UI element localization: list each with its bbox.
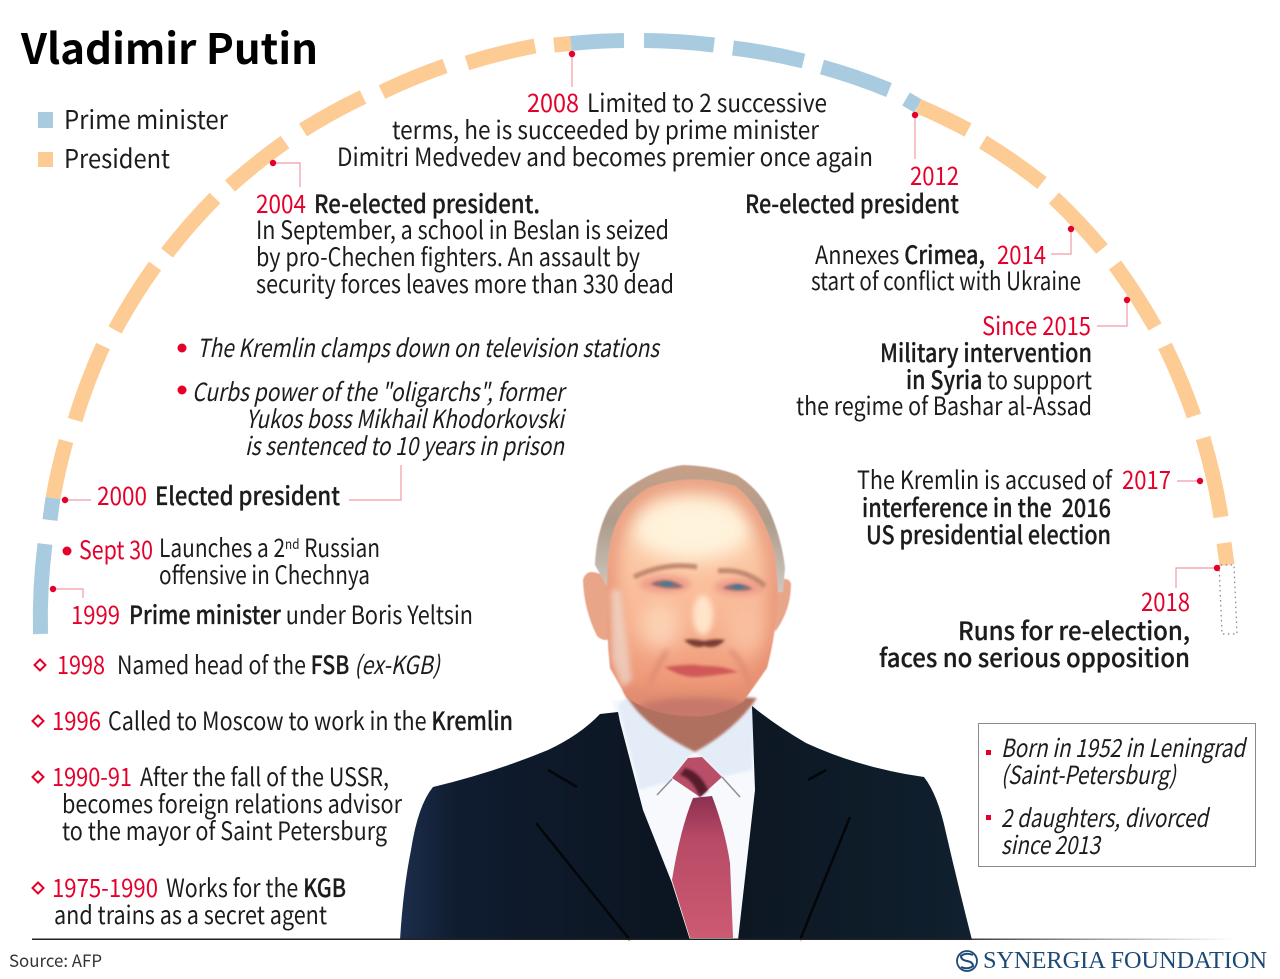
portrait: neck: [623, 690, 757, 752]
event: 2004: [256, 160, 674, 301]
event: 2012: Re-elected president: [745, 185, 959, 221]
portrait: forehead highlight: [632, 496, 752, 560]
event: 2018: Runs for re-election,: [958, 612, 1190, 648]
event: 2004: security forces leaves more than 330 dead: [256, 265, 674, 301]
legend: president: President: [64, 139, 170, 176]
event: 1996: Called to Moscow to work in the Kremlin: [108, 702, 513, 738]
event: 1990-91: to the mayor of Saint Petersburg: [62, 812, 387, 848]
event: 2008: [337, 51, 873, 174]
portrait: head: [583, 465, 791, 720]
panel: personal facts: (Saint-Petersburg): [1001, 756, 1177, 792]
portrait of Vladimir Putin: [400, 465, 972, 940]
event: 1975-1990: [32, 869, 346, 932]
icon: S roundel: [957, 951, 977, 971]
event: 2008: Limited to 2 successive: [587, 84, 827, 120]
event: since 2015 Syria: [796, 297, 1130, 423]
event: 2018: faces no serious opposition: [879, 639, 1190, 675]
portrait: hair: [595, 465, 785, 592]
event: 1999: [50, 586, 473, 632]
event: 1999: 1999: [71, 596, 120, 632]
portrait: collar shading: [618, 698, 755, 790]
notes: Kremlin and oligarchs: [178, 329, 661, 463]
portrait: collar flap edges: [657, 777, 740, 797]
event: 2017: 2017: [1122, 461, 1171, 497]
event: Sept 30: Launches a 2: [159, 529, 310, 565]
event: 1975-1990: 1975-1990: [52, 869, 158, 905]
panel: personal facts: [978, 724, 1256, 866]
event: 2000: 2000: [97, 477, 147, 513]
event: Sept 30: nd: [285, 534, 299, 554]
logo: Synergia Foundation: SYNERGIA FOUNDATION: [983, 948, 1267, 974]
portrait: brows and eyes: [634, 566, 766, 596]
portrait: nose: [684, 595, 725, 647]
event: since 2015 Syria: Military intervention: [880, 334, 1092, 370]
event: 1975-1990: Works for the KGB: [166, 869, 346, 905]
notes: Kremlin and oligarchs: is sentenced to 10 years in prison: [245, 427, 565, 463]
event: 2018: 2018: [1141, 583, 1190, 619]
event: 1998: 1998: [57, 646, 105, 682]
event: Sept 30: Sept 30: [79, 531, 153, 567]
title: Vladimir Putin: [20, 16, 318, 77]
event: 1990-91: 1990-91: [52, 758, 132, 794]
event: 2008: terms, he is succeeded by prime minister: [392, 111, 819, 147]
event: 1990-91: becomes foreign relations advisor: [62, 785, 402, 821]
baseline rule: [32, 938, 1232, 940]
event: 2017: US presidential election: [866, 516, 1111, 552]
event: 1990-91: After the fall of the USSR,: [140, 758, 389, 794]
event: 1999: Prime minister under Boris Yeltsin: [129, 596, 473, 632]
event: Sept 30: offensive in Chechnya: [159, 556, 370, 592]
event: 2017: [857, 461, 1203, 552]
portrait: lapel lines: [536, 770, 850, 940]
event: 2017: interference in the 2016: [862, 489, 1111, 525]
event: 2018: [879, 565, 1220, 675]
portrait: face edge shading: [606, 479, 778, 686]
event: 2012: 2012: [910, 157, 959, 193]
event: 1990-91: [32, 758, 402, 848]
event: 2000: [62, 465, 401, 513]
portrait: cheeks: [640, 601, 680, 649]
event: since 2015 Syria: the regime of Bashar al-Assad: [796, 387, 1092, 423]
notes: Kremlin and oligarchs: The Kremlin clamps down on television stations: [197, 329, 661, 365]
event: since 2015 Syria: Since 2015: [982, 307, 1091, 343]
event: 2004: 2004: [256, 185, 306, 221]
event: 2017: The Kremlin is accused of: [857, 461, 1113, 497]
event: 2014 Crimea: Annexes Crimea,: [815, 236, 985, 272]
event: 2012: [745, 112, 959, 221]
event: 2014 Crimea: [811, 226, 1081, 298]
event: 2008: Dimitri Medvedev and becomes premier once again: [337, 138, 873, 174]
event: 2000: Elected president: [155, 477, 340, 513]
event: 2014 Crimea: start of conflict with Ukraine: [811, 262, 1081, 298]
event: 1975-1990: and trains as a secret agent: [54, 896, 327, 932]
notes: Kremlin and oligarchs: Curbs power of the "oligarchs", former: [192, 373, 568, 409]
event: 2004: by pro-Chechen fighters. An assault by: [256, 238, 640, 274]
portrait: suit: [400, 706, 972, 940]
panel: personal facts: 2 daughters, divorced: [1001, 799, 1211, 835]
event: 1998: Named head of the FSB (ex-KGB): [117, 646, 441, 682]
legend: [38, 100, 229, 176]
panel: personal facts: since 2013: [1001, 826, 1102, 862]
event: 2004: Re-elected president.: [314, 185, 540, 221]
timeline arc: [40, 40, 1237, 634]
event: 2004: In September, a school in Beslan is seized: [256, 211, 669, 247]
portrait: mouth: [665, 665, 738, 677]
event: Sept 30: Russian: [299, 529, 380, 565]
legend: prime minister: Prime minister: [64, 100, 229, 137]
source: Source: AFP: [9, 947, 102, 972]
event: 2014 Crimea: 2014: [997, 236, 1046, 272]
event: 1996: 1996: [52, 702, 101, 738]
portrait: ears: [583, 572, 791, 640]
portrait: tie: [672, 757, 733, 938]
portrait: shirt: [612, 700, 760, 940]
portrait: nasolabial folds: [650, 650, 748, 685]
portrait: face: [606, 479, 778, 717]
event: since 2015 Syria: in Syria to support: [906, 361, 1092, 397]
portrait: left cheek highlight: [611, 590, 632, 688]
event: 2008: 2008: [527, 84, 579, 120]
notes: Kremlin and oligarchs: Yukos boss Mikhail Khodorkovski: [246, 400, 567, 436]
event: Sept 30: [62, 529, 380, 592]
